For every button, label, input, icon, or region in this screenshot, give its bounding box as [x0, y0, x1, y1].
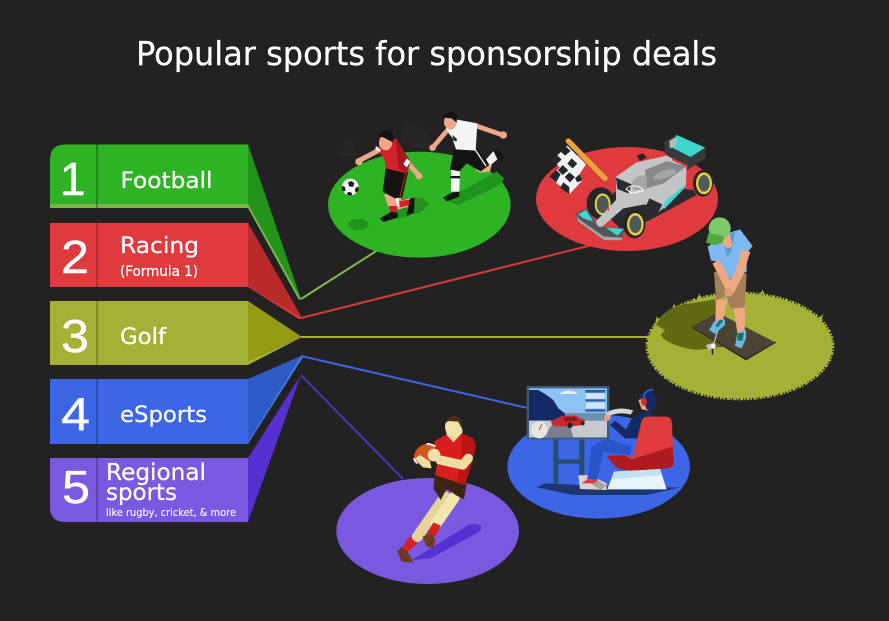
panel: golf bar [50, 301, 302, 365]
player shadow [412, 524, 482, 560]
grass blades [655, 290, 823, 325]
golf ball and club [706, 297, 727, 355]
speedometer [531, 422, 548, 438]
label: eSports: eSports [120, 402, 207, 428]
label: Racing: Racing [120, 233, 199, 259]
green pitch [328, 152, 511, 258]
rear wheel [693, 170, 713, 197]
panel: regional sports bar [50, 375, 301, 522]
illustration: formula 1 car [536, 134, 718, 251]
illustration: rugby player [336, 416, 519, 584]
golfer figure [706, 217, 753, 348]
regional fold [248, 375, 301, 522]
blue disc [507, 415, 690, 519]
player in red [355, 130, 422, 222]
pedal block [578, 475, 607, 490]
pitch shadows [348, 172, 504, 230]
football fold [248, 144, 301, 299]
racing car [575, 134, 713, 240]
connector lines [301, 245, 650, 479]
number 5: 5 [62, 461, 90, 513]
number 1: 1 [60, 153, 86, 205]
screen HUD [585, 390, 605, 412]
front wheel [623, 210, 645, 238]
screen race car [551, 415, 585, 427]
player in white [429, 112, 507, 201]
illustration: esports gamer [507, 386, 690, 519]
rear wing [664, 134, 706, 170]
car body [592, 156, 687, 230]
far front wheel [587, 187, 615, 219]
racing car: 4 [606, 206, 610, 213]
seat base [607, 468, 667, 489]
floor shadow [537, 483, 680, 495]
faint crowd shadow [340, 123, 433, 157]
front wing [575, 208, 624, 240]
number 2: 2 [61, 231, 89, 283]
rugby figure [397, 416, 476, 562]
label: Football: Football [120, 168, 212, 194]
label: Formula 1: (Formula 1) [120, 264, 198, 280]
golf mat [692, 313, 776, 360]
label: sports: sports [106, 480, 177, 506]
racing fold [248, 223, 303, 319]
label: Regional: Regional [106, 460, 206, 486]
esports fold [248, 356, 301, 442]
purple disc [336, 478, 519, 584]
golf fold [248, 301, 302, 361]
panel: esports bar [50, 356, 303, 444]
panel: racing bar [50, 223, 303, 319]
title: Popular sports for sponsorship deals [136, 35, 717, 73]
gamer figure [582, 389, 663, 483]
red track disc [536, 147, 718, 251]
panel: football bar [50, 144, 301, 300]
monitor [527, 386, 609, 439]
illustration: golfer [648, 217, 832, 398]
racing seat [607, 417, 674, 471]
number 4: 4 [61, 388, 90, 440]
golfer shadow [656, 299, 725, 350]
label: like rugby, cricket, and more: like rugby, cricket, & more [106, 506, 236, 519]
monitor stand [553, 439, 584, 483]
label: Golf: Golf [120, 324, 167, 350]
illustration: football players [328, 112, 511, 258]
checkered flag [549, 141, 605, 194]
grass disc [648, 294, 832, 398]
number 3: 3 [61, 310, 89, 362]
rugby ball [410, 439, 440, 469]
football ball [342, 179, 359, 196]
car floor [597, 182, 697, 232]
